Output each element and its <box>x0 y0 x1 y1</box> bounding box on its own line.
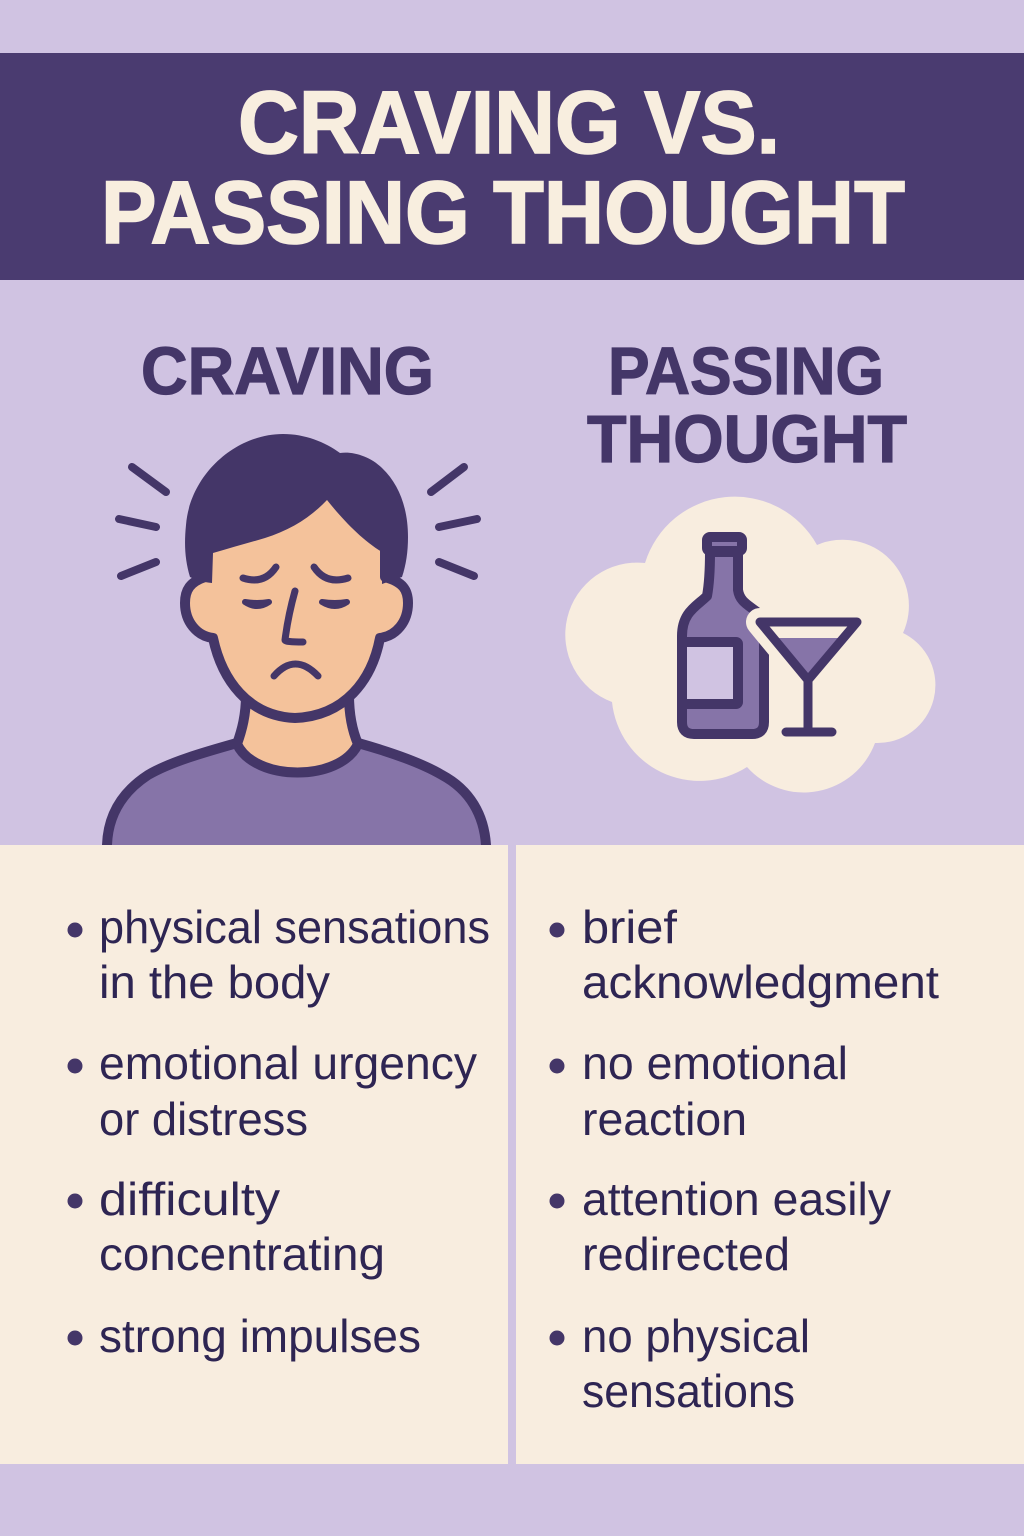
text: craving items: difficulty <box>99 1173 280 1225</box>
text: passing thought items <box>582 901 939 1417</box>
illustration: thought cloud with drinks <box>565 497 935 792</box>
title <box>101 72 905 262</box>
head <box>185 490 408 718</box>
text: passing thought items: sensations <box>582 1365 795 1417</box>
text: craving items <box>99 901 490 1362</box>
heading: passing thought: THOUGHT <box>587 402 907 477</box>
thought cloud <box>565 497 935 792</box>
text: craving items: in the body <box>99 956 330 1008</box>
text: craving items: or distress <box>99 1093 308 1145</box>
heading: craving: CRAVING <box>141 334 434 409</box>
panel: craving list <box>0 845 508 1464</box>
text: passing thought items: reaction <box>582 1093 747 1145</box>
title: CRAVING VS. <box>238 72 780 172</box>
text: passing thought items: no physical <box>582 1310 810 1362</box>
heading: passing thought <box>587 334 907 477</box>
heading: passing thought: PASSING <box>608 334 884 409</box>
text: passing thought items: brief <box>582 901 677 953</box>
shirt <box>107 743 486 870</box>
bullets: passing thought <box>550 922 564 1346</box>
title banner <box>0 53 1024 280</box>
neck <box>237 695 358 772</box>
title: PASSING THOUGHT <box>101 162 905 262</box>
text: passing thought items: redirected <box>582 1228 790 1280</box>
illustration: distressed person <box>107 434 486 870</box>
text: craving items: emotional urgency <box>99 1037 477 1089</box>
bullets: craving <box>68 922 82 1346</box>
icon: bottle <box>682 537 764 734</box>
text: craving items: strong impulses <box>99 1310 421 1362</box>
icon: martini glass <box>760 622 857 732</box>
hair <box>185 434 408 584</box>
text: passing thought items: no emotional <box>582 1037 848 1089</box>
stress lines <box>119 467 477 576</box>
text: craving items: physical sensations <box>99 901 490 953</box>
text: craving items: concentrating <box>99 1228 385 1280</box>
text: passing thought items: attention easily <box>582 1173 891 1225</box>
panel: passing thought list <box>516 845 1024 1464</box>
face features <box>243 567 348 676</box>
text: passing thought items: acknowledgment <box>582 956 939 1008</box>
